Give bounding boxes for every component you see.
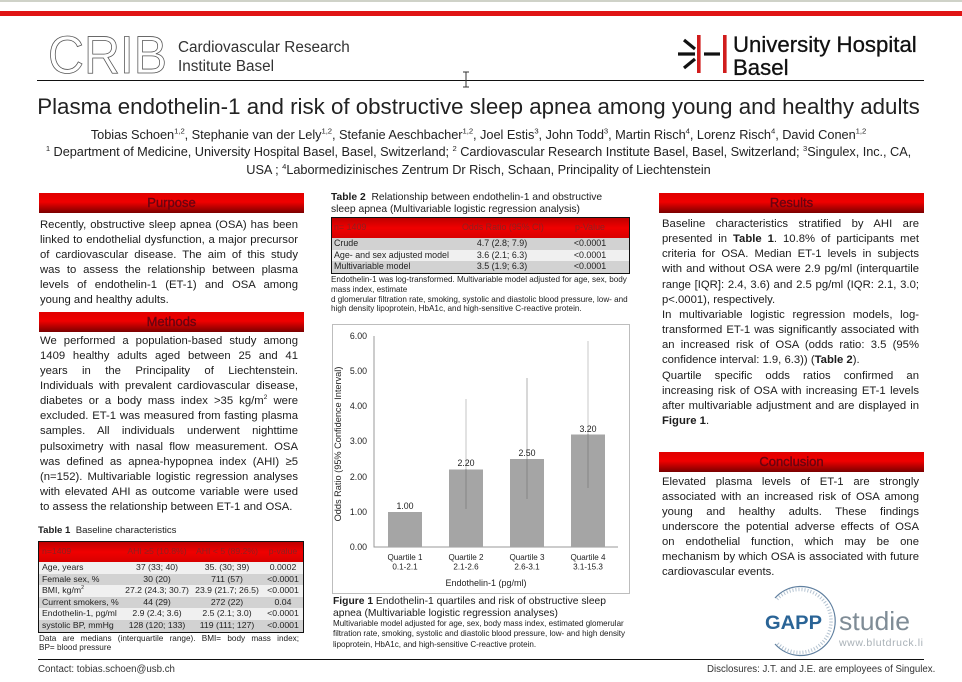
table 2 note: Endothelin-1 was log-transformed. Multivariable model adjusted for age, sex, body <box>331 275 627 284</box>
gapp wordmark: GAPP <box>765 613 822 634</box>
heading: methods <box>39 312 304 332</box>
logo: GAPP studie <box>765 586 923 656</box>
table 1 grid <box>38 541 304 633</box>
table 1 grid: 711 (57) <box>211 574 243 584</box>
value labels: 1.00 <box>396 501 414 511</box>
caption heading <box>333 596 606 619</box>
text: results body: Quartile specific odds ratios confirmed an <box>662 370 919 382</box>
table 1 grid: 23.9 (21.7; 26.5) <box>195 585 259 595</box>
header rule <box>37 80 924 81</box>
table 2 note <box>331 275 628 313</box>
panel: purpose <box>39 193 304 306</box>
text: conclusion body: cardiovascular events. <box>662 566 774 578</box>
table 1 grid: 30 (20) <box>143 574 171 584</box>
wordmark: University Hospital <box>733 32 917 57</box>
text: results body: presented in Table 1. 10.8% of participants met <box>662 233 919 245</box>
table 2 grid: Age- and sex adjusted model <box>334 250 449 260</box>
table 1 grid: Current smokers, % <box>42 597 119 607</box>
text: results body: Figure 1. <box>662 415 709 427</box>
text: purpose body: of cardiovascular disease. The aim of this study <box>40 249 298 261</box>
wordmark: Basel <box>733 55 789 80</box>
bars <box>388 434 605 547</box>
value labels: 3.20 <box>579 424 597 434</box>
value labels: 2.20 <box>457 458 475 468</box>
text: conclusion body: associated with an increased risk of OSA among <box>662 491 919 503</box>
wordmark <box>733 32 917 80</box>
text: methods body: (n=152). Multivariable logistic regression analyses <box>40 471 298 483</box>
url: www.blutdruck.li <box>838 637 923 649</box>
top rule <box>0 0 962 2</box>
panel: results <box>659 193 924 427</box>
title: Plasma endothelin-1 and risk of obstructive sleep apnea among young and healthy adults <box>37 94 920 119</box>
category labels: Quartile 1 <box>387 553 423 562</box>
table 1 grid: <0.0001 <box>267 620 299 630</box>
table 2 grid: Odds Ratio (95% CI) <box>462 222 544 232</box>
table 1 grid: 0.0002 <box>270 562 296 572</box>
table 2 grid: <0.0001 <box>574 261 606 271</box>
text: purpose body: was to assess the relationship between plasma <box>40 264 298 276</box>
text: methods body: 1409 healthy adults aged between 25 and 41 <box>40 350 298 362</box>
top red band <box>0 11 962 16</box>
y axis: 2.00 <box>350 472 367 482</box>
heading: conclusion <box>659 452 924 472</box>
table 2 grid: <0.0001 <box>574 250 606 260</box>
text: purpose body: linked to endothelial dysfunction, a major precursor <box>40 234 298 246</box>
heading: purpose <box>39 193 304 213</box>
category labels <box>387 553 606 572</box>
text: methods body: years in the Principality of Liechtenstein. <box>40 365 298 377</box>
y axis: 6.00 <box>350 331 367 341</box>
disclosures: Disclosures: J.T. and J.E. are employees of Singulex. <box>707 664 935 675</box>
text: conclusion body: mechanism by which OSA is associated with future <box>662 551 919 563</box>
table 2 grid: p-Value <box>575 222 605 232</box>
affiliations: USA ; 4Labormedizinisches Zentrum Dr Risch, Schaan, Principality of Liechtenstein <box>246 161 711 176</box>
table 1 note: Data are medians (interquartile range). BMI= body mass index; <box>39 634 299 642</box>
text: methods body: samples. All individuals underwent nighttime <box>40 425 298 437</box>
text: results body: increasing risk of OSA with increasing ET-1 levels <box>662 385 919 397</box>
table 1 grid: 44 (29) <box>143 597 171 607</box>
table 2 note: high density lipoprotein, HbA1c, and high-sensitive C-reactive protein. <box>331 304 582 313</box>
institute name <box>178 39 350 75</box>
table 1 grid: BMI, kg/m2 <box>42 585 84 595</box>
text: results body: an increased risk of OSA (odds ratio: 3.5 (95% <box>662 339 919 351</box>
text: methods body <box>40 334 298 513</box>
x axis title: Endothelin-1 (pg/ml) <box>445 578 527 588</box>
logo: University Hospital Basel <box>678 32 917 80</box>
text: conclusion body <box>662 476 919 578</box>
table 2 grid: Multivariable model <box>334 261 410 271</box>
text: purpose body: Recently, obstructive sleep apnea (OSA) has been <box>40 219 298 231</box>
text: conclusion body: young and healthy adults. These findings <box>662 506 919 518</box>
table 1 grid: p-value <box>269 546 297 556</box>
institute name: Cardiovascular Research <box>178 39 350 56</box>
text: methods body: Individuals with prevalent cardiovascular disease, <box>40 380 298 392</box>
table 1 caption: Table 1 Baseline characteristics <box>38 525 176 536</box>
text: conclusion body: underscore the potential adverse effects of OSA <box>662 521 919 533</box>
y axis: 0.00 <box>350 542 367 552</box>
table 1 grid: <0.0001 <box>267 585 299 595</box>
bar chart: figure 1 <box>332 324 630 594</box>
y axis <box>350 331 618 552</box>
icon: text cursor <box>463 72 469 88</box>
table 1 note: BP= blood pressure <box>39 643 111 652</box>
error bars <box>466 341 588 509</box>
panel: methods <box>39 312 304 513</box>
institute name: Institute Basel <box>178 58 274 75</box>
y axis: 3.00 <box>350 436 367 446</box>
icon: gauge arc <box>775 586 835 656</box>
text: results body: p<.0001), respectively. <box>662 294 775 306</box>
value labels <box>396 424 597 511</box>
table 1 grid: 0.04 <box>275 597 291 607</box>
table 2 grid: 3.5 (1.9; 6.3) <box>477 261 527 271</box>
text: methods body: excluded. ET-1 was measured from fasting plasma <box>40 410 298 422</box>
text: results body: after multivariable adjustment and are displayed in <box>662 400 919 412</box>
caption note <box>333 619 625 649</box>
text: results body: range [IQR]: 2.4, 3.6) and 2.5 pg/ml (IQR: 2.1, 3.0; <box>662 279 919 291</box>
value labels: 2.50 <box>518 448 536 458</box>
table 1 grid: <0.0001 <box>267 574 299 584</box>
text: methods body: pulsoximetry with nasal flow measurement. OSA <box>40 441 298 453</box>
contact: Contact: tobias.schoen@usb.ch <box>38 664 175 675</box>
table 1 grid: 2.5 (2.1; 3.0) <box>202 608 252 618</box>
table 2 grid: Crude <box>334 238 358 248</box>
table 1 note <box>39 634 299 652</box>
panel: table 2 <box>331 192 630 313</box>
category labels: 0.1-2.1 <box>392 562 418 572</box>
table 2 grid <box>331 217 630 274</box>
y axis: 5.00 <box>350 366 367 376</box>
category labels: 2.1-2.6 <box>453 562 479 572</box>
text: results body: Baseline characteristics stratified by AHI are <box>662 218 919 230</box>
panel: table 1 <box>38 525 304 652</box>
authors: Tobias Schoen1,2, Stephanie van der Lely1,2, Stefanie Aeschbacher1,2, Joel Estis3, John Todd3, Martin Risch4, Lorenz Risch4, David Conen1,2 <box>91 126 866 142</box>
table 1 grid: 35. (30; 39) <box>205 562 249 572</box>
text: results body: confidence interval: 1.9, 6.3)) (Table 2). <box>662 354 860 366</box>
category labels: Quartile 2 <box>448 553 484 562</box>
table 1 grid: 128 (120; 133) <box>129 620 185 630</box>
text: conclusion body: on endothelial function, which may be one <box>662 536 919 548</box>
affiliations: 1 Department of Medicine, University Hospital Basel, Basel, Switzerland; 2 Cardiovascular Research Institute Basel, Basel, Switzerland; 3Singulex, Inc., CA, <box>46 143 911 158</box>
studie wordmark: studie <box>839 606 910 636</box>
heading: methods: Methods <box>147 314 196 329</box>
table 2 caption: sleep apnea (Multivariable logistic regression analysis) <box>331 204 580 215</box>
table 1 grid: Female sex, % <box>42 574 99 584</box>
text: methods body: was defined as apnea-hypopnea index (AHI) ≥5 <box>40 456 298 468</box>
caption heading: Figure 1 Endothelin-1 quartiles and risk of obstructive sleep <box>333 596 606 607</box>
category labels: 2.6-3.1 <box>514 562 540 572</box>
heading: conclusion: Conclusion <box>759 454 824 469</box>
table 2 note: mass index, estimate <box>331 285 407 294</box>
table 1 grid: 2.9 (2.4; 3.6) <box>132 608 182 618</box>
table 2 grid: 3.6 (2.1; 6.3) <box>477 250 527 260</box>
table 2 grid: n= 1409 <box>334 222 366 232</box>
table 1 grid: 27.2 (24.3; 30.7) <box>125 585 189 595</box>
figure 1 caption <box>333 596 625 649</box>
table 2 grid: 4.7 (2.8; 7.9) <box>477 238 527 248</box>
icon: hospital mark <box>678 35 727 73</box>
table 1 grid: Age, years <box>42 562 84 572</box>
text: methods body: with elevated AHI as outcome variable were used <box>40 486 298 498</box>
text: results body: with and without OSA were 2.9 pg/ml (interquartile <box>662 263 919 275</box>
affiliations <box>46 143 911 176</box>
table 1 grid: 119 (111; 127) <box>200 620 254 630</box>
text: results body: criteria for OSA. Median ET-1 levels in subjects <box>662 248 919 260</box>
text: methods body: to assess the relationship between ET-1 and OSA. <box>40 501 292 513</box>
panel: conclusion <box>659 452 924 578</box>
table 2 caption <box>331 192 602 215</box>
heading: results <box>659 193 924 213</box>
caption note: Multivariable model adjusted for age, sex, body mass index, estimated glomerular <box>333 619 624 628</box>
text: results body: In multivariable logistic regression models, log- <box>662 309 919 321</box>
caption heading: apnea (Multivariable logistic regression analyses) <box>333 608 558 619</box>
heading: results: Results <box>770 195 813 210</box>
text: purpose body: levels of endothelin-1 (ET-1) and OSA among <box>40 279 298 291</box>
table 1 grid: 37 (33; 40) <box>136 562 178 572</box>
caption note: lipoprotein, HbA1c, and high-sensitive C-reactive protein. <box>333 640 536 649</box>
y axis title: Odds Ratio (95% Confidence Interval) <box>333 367 343 521</box>
text: methods body: We performed a population-based study among <box>40 334 298 346</box>
caption note: filtration rate, smoking, systolic and diastolic blood pressure, low- and high density <box>333 629 625 638</box>
table 1 grid: AHI ≥5 (10.8%) <box>127 546 187 556</box>
text: results body: transformed ET-1 was significantly associated with <box>662 324 919 336</box>
table 2 grid: <0.0001 <box>574 238 606 248</box>
table 2 note: d glomerular filtration rate, smoking, systolic and diastolic blood pressure, low- and <box>331 295 628 304</box>
table 1 grid: AHI < 5 (89.2%) <box>196 546 258 556</box>
table 1 grid: n=1409 <box>42 546 71 556</box>
text: purpose body: young and healthy adults. <box>40 294 169 306</box>
y axis: 4.00 <box>350 401 367 411</box>
table 1 grid: Endothelin-1, pg/ml <box>42 608 117 618</box>
text: conclusion body: Elevated plasma levels of ET-1 are strongly <box>662 476 919 488</box>
table 1 grid: <0.0001 <box>267 608 299 618</box>
table 1 grid: 272 (22) <box>211 597 243 607</box>
text: results body <box>662 218 919 427</box>
table 2 caption: Table 2 Relationship between endothelin-1 and obstructive <box>331 192 602 203</box>
category labels: Quartile 4 <box>570 553 606 562</box>
y axis: 1.00 <box>350 507 367 517</box>
text: methods body: diabetes or a body mass index >35 kg/m2 were <box>40 394 298 407</box>
text: purpose body <box>40 219 298 306</box>
category labels: 3.1-15.3 <box>573 562 603 572</box>
footer rule <box>38 659 924 660</box>
table 1 grid: systolic BP, mmHg <box>42 620 114 630</box>
heading: purpose: Purpose <box>147 195 196 210</box>
category labels: Quartile 3 <box>509 553 545 562</box>
